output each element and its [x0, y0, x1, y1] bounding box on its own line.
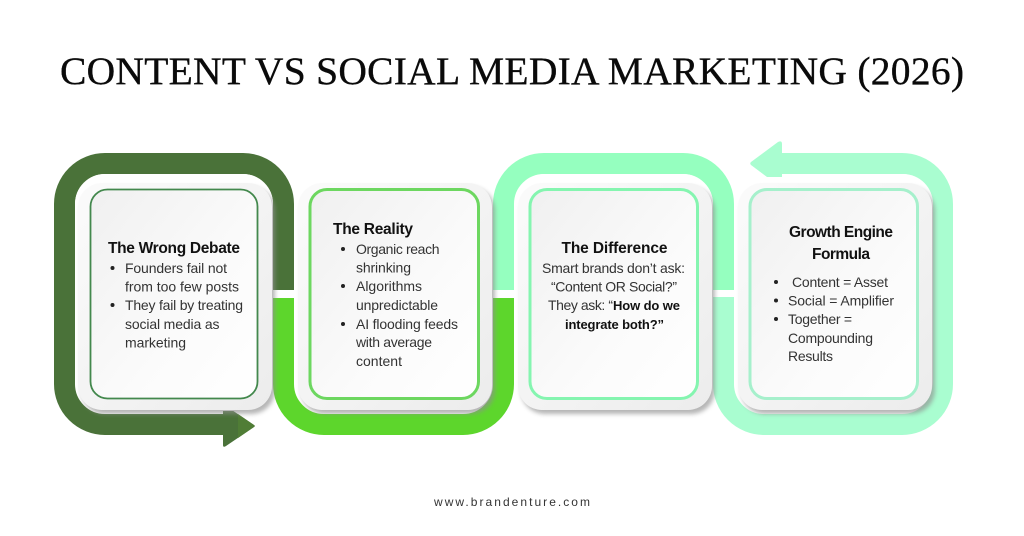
card 4 bullets: Content = Asset: [792, 274, 888, 290]
card 3 text: Smart brands don’t ask:: [542, 260, 685, 276]
title: CONTENT VS SOCIAL MEDIA MARKETING (2026): [60, 49, 964, 93]
card 2 bullets: AI flooding feeds: [356, 316, 458, 332]
card 2 bullets: with average: [355, 334, 432, 350]
card 4 bullets: Compounding: [788, 330, 873, 346]
card 4 heading: Formula: [812, 246, 870, 263]
card 3 text: How do we: [613, 298, 680, 313]
card 3: the difference: [515, 174, 715, 414]
mint path: [504, 164, 724, 290]
card 4 bullets: Social = Amplifier: [788, 292, 894, 308]
card 3 heading: The Difference: [562, 240, 668, 257]
footer website: www.brandenture.com: [433, 495, 590, 509]
card 2: the reality: [295, 174, 495, 414]
arrow: light mint head: [750, 141, 782, 177]
light mint path: [724, 164, 942, 424]
card 4 heading: Growth Engine: [789, 224, 893, 241]
card 1 bullets: Founders fail not: [125, 260, 227, 276]
card 1 heading: The Wrong Debate: [108, 240, 240, 257]
card 2 bullets: content: [356, 353, 402, 369]
card 1 bullets: social media as: [125, 316, 220, 332]
card 1: the wrong debate: [75, 174, 275, 414]
card 1 bullets: They fail by treating: [125, 297, 243, 313]
card 1 bullets: from too few posts: [125, 278, 239, 294]
card 3 text: They ask: “: [548, 297, 613, 313]
card 3 text: integrate both?”: [565, 317, 664, 332]
bright green path: [284, 298, 504, 424]
card 4 heading: [789, 224, 893, 263]
card 4: growth engine formula: [734, 174, 935, 414]
card 4 bullets: Results: [788, 348, 833, 364]
card 1 bullets: marketing: [125, 334, 186, 350]
card 2 bullets: Algorithms: [356, 278, 422, 294]
card 2 bullets: [341, 241, 458, 369]
card 4 bullets: [774, 274, 894, 364]
card 2 heading: The Reality: [333, 221, 413, 238]
card 3 text: [542, 260, 685, 332]
card 2 bullets: shrinking: [356, 260, 411, 276]
card 3 text: “Content OR Social?”: [551, 278, 677, 294]
dark green path with arrow: [64, 164, 284, 447]
card 1 bullets: [110, 260, 243, 350]
card 2 bullets: unpredictable: [356, 297, 438, 313]
card 4 bullets: Together =: [788, 311, 852, 327]
card 2 bullets: Organic reach: [356, 241, 440, 257]
